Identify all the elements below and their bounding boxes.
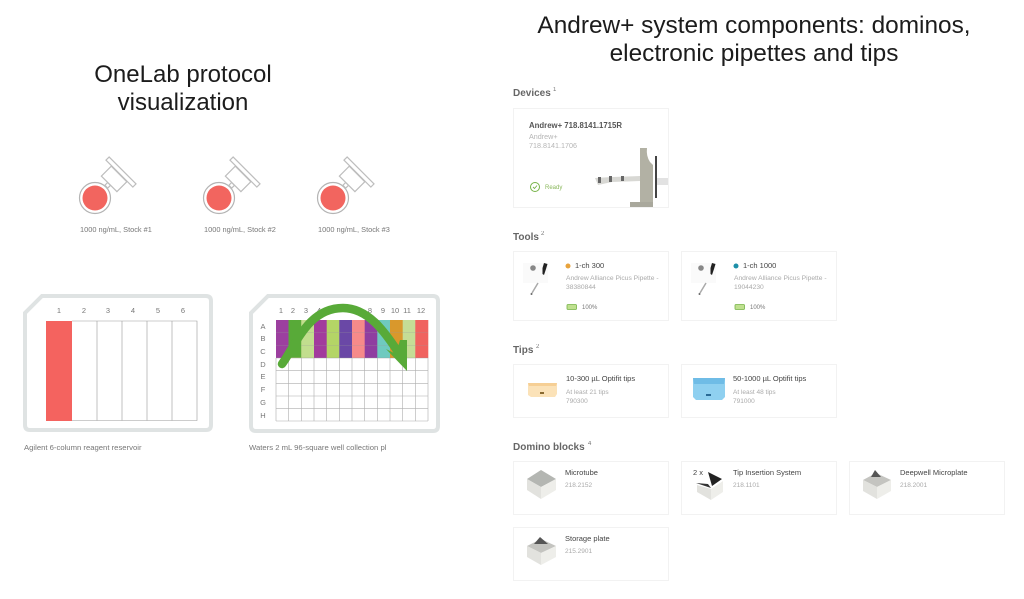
card: 50-1000 tips: 791000 — [733, 398, 755, 405]
well plate: 96-well collection plate: D — [260, 360, 266, 369]
section: domino blocks heading: 4 — [588, 441, 592, 447]
section: domino blocks heading: Domino blocks — [513, 442, 585, 453]
title: OneLab protocol visualization: visualization — [118, 89, 248, 116]
card: Storage plate — [514, 528, 668, 580]
card: 50-1000 tips — [682, 364, 836, 418]
well plate: 96-well collection plate: 4 — [317, 306, 321, 315]
card: 10-300 tips: 790300 — [566, 398, 588, 405]
arrow: green transfer arrow — [282, 308, 407, 371]
well plate: 96-well collection plate: C — [260, 347, 266, 356]
section: devices heading: 1 — [553, 87, 557, 93]
title: OneLab protocol visualization: OneLab protocol — [94, 61, 272, 88]
icon: orange tip box — [528, 383, 557, 397]
card: 50-1000 tips: At least 48 tips — [733, 389, 776, 396]
card: Storage plate: Storage plate — [565, 534, 610, 543]
well plate: 96-well collection plate: G — [260, 398, 266, 407]
section: tips heading — [513, 344, 540, 356]
card: 1-ch 300 pipette: 38380844 — [566, 284, 596, 291]
icon: stock vial 2 — [204, 157, 260, 214]
reservoir: 6-column plate: 4 — [131, 306, 135, 315]
icon: pipette — [691, 263, 716, 295]
card: Andrew+ device: Andrew+ — [529, 132, 558, 141]
well plate: 96-well collection plate: H — [260, 411, 266, 420]
well plate: 96-well collection plate: F — [261, 385, 266, 394]
well plate: 96-well collection plate: 9 — [381, 306, 385, 315]
icon: ready: Ready — [545, 185, 562, 191]
card: 1-ch 1000 pipette: 19044230 — [734, 284, 764, 291]
well plate: 96-well collection plate: 2 — [291, 306, 295, 315]
well plate: 96-well collection plate: 1 — [279, 306, 283, 315]
icon: domino block — [527, 537, 556, 565]
icon: pipette — [523, 263, 548, 295]
card: 10-300 tips: 10-300 µL Optifit tips — [566, 374, 635, 383]
well plate: 96-well collection plate: 10 — [391, 306, 399, 315]
icon: domino block — [863, 470, 891, 499]
card: 1-ch 1000 pipette: Andrew Alliance Picus Pipette - — [734, 275, 827, 282]
icon: battery — [735, 304, 744, 310]
card: 10-300 tips: At least 21 tips — [566, 389, 609, 396]
card: Microtube: 218.2152 — [565, 482, 592, 489]
coloured columns A to C — [276, 320, 428, 358]
title: Andrew+ system components — [537, 12, 971, 67]
title: OneLab protocol visualization — [94, 61, 272, 116]
card: 10-300 tips — [514, 364, 668, 418]
well plate: 96-well collection plate: B — [260, 334, 266, 343]
card: Microtube — [514, 462, 668, 514]
card: Deepwell Microplate: 218.2001 — [900, 482, 927, 489]
reservoir: 6-column plate: 5 — [156, 306, 160, 315]
title: Andrew+ system components: Andrew+ system components: dominos, — [537, 12, 971, 39]
card: 1-ch 1000 pipette: 1-ch 1000 — [743, 261, 776, 270]
label: reservoir: Agilent 6-column reagent reservoir — [24, 443, 142, 452]
title: Andrew+ system components: electronic pipettes and tips — [610, 40, 898, 67]
card: 1-ch 300 pipette — [514, 252, 668, 320]
illustration: Andrew+ robot — [595, 148, 668, 207]
section: tips heading: 2 — [536, 344, 540, 350]
card: Storage plate: 215.2901 — [565, 548, 592, 555]
card: Tip Insertion System: 218.1101 — [733, 482, 760, 489]
card: Andrew+ device — [514, 108, 668, 208]
card: 1-ch 300 pipette: 1-ch 300 — [575, 261, 604, 270]
well plate: 96-well collection plate — [251, 296, 438, 431]
card: 1-ch 300 pipette: Andrew Alliance Picus Pipette - — [566, 275, 659, 282]
icon: ready — [530, 182, 562, 192]
label: stock 1: 1000 ng/mL, Stock #1 — [80, 225, 152, 234]
card: 1-ch 1000 pipette — [682, 252, 836, 320]
card: Microtube: Microtube — [565, 468, 598, 477]
reservoir: 6-column plate: 6 — [181, 306, 185, 315]
reservoir: 6-column plate: 1 — [57, 306, 61, 315]
well plate: 96-well collection plate: 8 — [368, 306, 372, 315]
label: stock 3: 1000 ng/mL, Stock #3 — [318, 225, 390, 234]
card: Tip Insertion System — [682, 462, 836, 514]
section: tools heading: 2 — [541, 231, 545, 237]
card: Tip Insertion System: 2 x — [693, 468, 703, 477]
well plate: 96-well collection plate: 11 — [403, 306, 411, 315]
icon: blue tip box — [693, 378, 725, 400]
reservoir: 6-column plate: 3 — [106, 306, 110, 315]
label: stock 2: 1000 ng/mL, Stock #2 — [204, 225, 276, 234]
icon: open domino block — [696, 472, 723, 500]
card: 50-1000 tips: 50-1000 µL Optifit tips — [733, 374, 806, 383]
icon: domino block — [527, 470, 556, 499]
section: devices heading: Devices — [513, 88, 551, 99]
card: 1-ch 1000 pipette: 100% — [750, 305, 766, 311]
icon: battery — [567, 304, 576, 310]
icon: stock vial 1 — [80, 157, 136, 214]
card: Deepwell Microplate: Deepwell Microplate — [900, 468, 968, 477]
card: Deepwell Microplate — [850, 462, 1004, 514]
card: 1-ch 300 pipette: 100% — [582, 305, 598, 311]
section: tips heading: Tips — [513, 345, 534, 356]
well plate: 96-well collection plate: A — [260, 322, 266, 331]
card: Tip Insertion System: Tip Insertion System — [733, 468, 801, 477]
section: tools heading: Tools — [513, 232, 539, 243]
well plate: 96-well collection plate: E — [260, 372, 266, 381]
icon: stock vial 3 — [318, 157, 374, 214]
well plate: 96-well collection plate: 3 — [304, 306, 308, 315]
label: well plate: Waters 2 mL 96-square well collection pl — [249, 443, 387, 452]
card: Andrew+ device: 718.8141.1706 — [529, 141, 577, 150]
reservoir: 6-column plate: 2 — [82, 306, 86, 315]
well plate: 96-well collection plate: 12 — [417, 306, 425, 315]
reservoir: 6-column plate — [25, 296, 211, 430]
card: Andrew+ device: Andrew+ 718.8141.1715R — [529, 121, 622, 130]
